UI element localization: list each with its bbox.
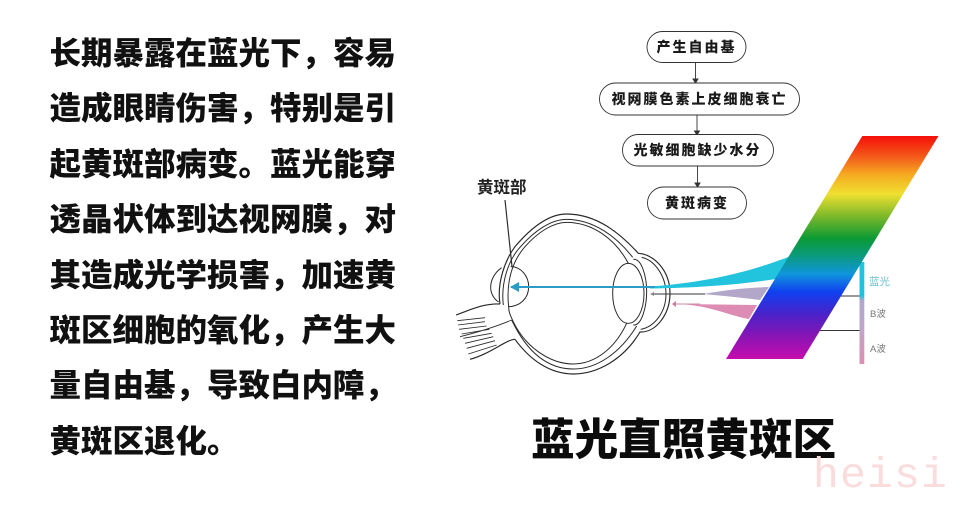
label: UVA: A波 [870, 343, 886, 355]
outer bulge [491, 268, 502, 302]
lens [613, 263, 644, 323]
flow step: free radicals: 产生自由基 [656, 39, 736, 55]
flow step: macular lesion: 黄斑病变 [665, 195, 729, 211]
flowchart [600, 32, 800, 219]
body text block: 量自由基，导致白内障， [50, 367, 396, 403]
body text block: 透晶状体到达视网膜，对 [50, 201, 396, 237]
watermark: heisi [813, 451, 948, 500]
connector lines [820, 296, 860, 330]
wavelength side bar [860, 262, 864, 364]
iris and ciliary body [633, 259, 647, 325]
blue light ray [510, 282, 655, 292]
arrow [694, 115, 700, 135]
body text block: 斑区细胞的氧化，产生大 [50, 312, 396, 348]
macula circle [508, 267, 529, 307]
body text block: 造成眼睛伤害，特别是引 [50, 90, 396, 126]
cornea inner line [641, 257, 666, 329]
label: UVB: B波 [870, 308, 886, 320]
flow step: macular lesion [648, 187, 746, 219]
flow step: photoreceptors lose water [622, 134, 774, 166]
flow step: RPE cell decline [600, 83, 800, 115]
body text block: 黄斑区退化。 [50, 423, 239, 459]
body text block: 长期暴露在蓝光下，容易 [50, 35, 396, 71]
macula leader line [505, 200, 512, 267]
label: macula: 黄斑部 [477, 177, 526, 197]
eye diagram [456, 200, 670, 374]
rainbow spectrum band [726, 136, 938, 359]
flow step: RPE cell decline: 视网膜色素上皮细胞衰亡 [612, 91, 788, 107]
title: 蓝光直照黄斑区 [531, 417, 836, 465]
body text block [50, 35, 396, 459]
UVB ray [650, 292, 705, 296]
body text block: 起黄斑部病变。蓝光能穿 [50, 146, 396, 182]
flow step: photoreceptors lose water: 光敏细胞缺少水分 [634, 142, 762, 158]
light wedge: blue light [650, 256, 791, 288]
light wedge: UVB [703, 287, 769, 300]
label: blue light: 蓝光 [869, 275, 890, 288]
light wedge: UVA [680, 304, 757, 319]
body text block: 其造成光学损害，加速黄 [50, 257, 396, 293]
arrow [695, 166, 700, 187]
flow step: free radicals [647, 32, 746, 62]
optic nerve [456, 304, 515, 359]
UVA ray [672, 301, 700, 307]
retina [508, 222, 628, 364]
arrow [693, 63, 698, 83]
eyeball outer wall [499, 214, 670, 374]
middle wall [503, 219, 633, 305]
